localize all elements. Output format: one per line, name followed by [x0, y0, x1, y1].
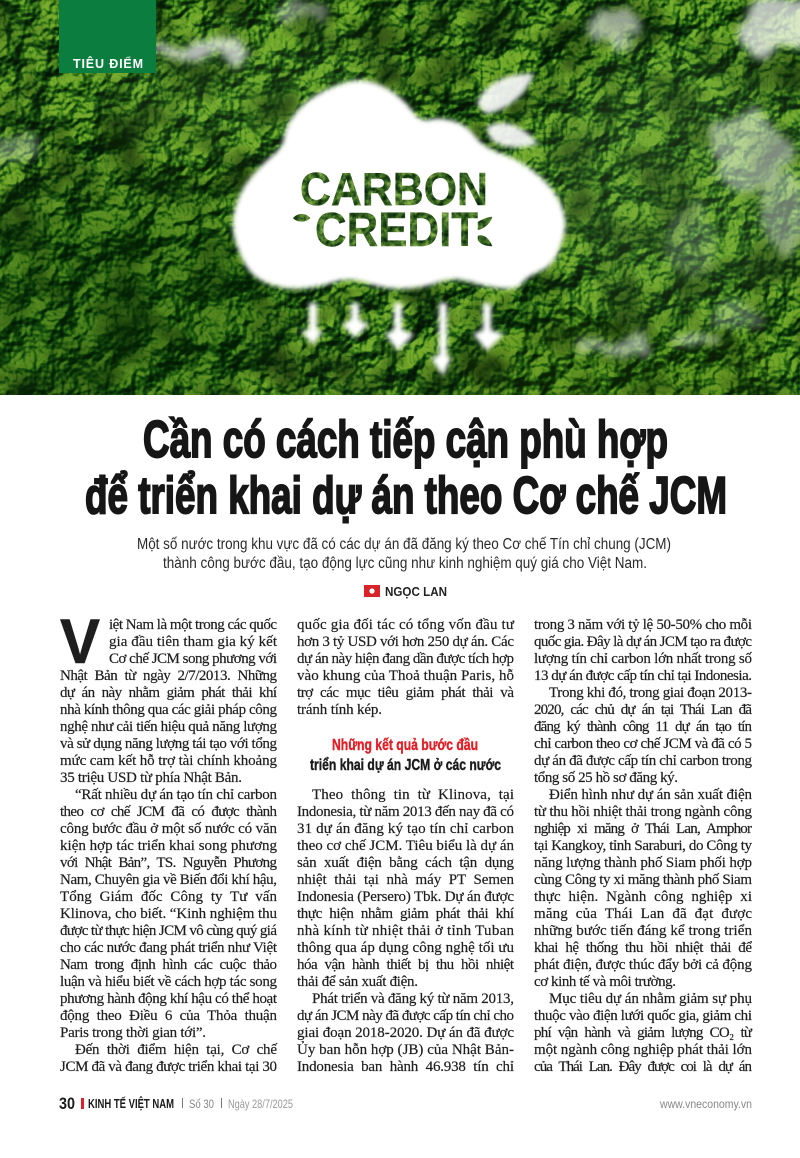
- footer: 30: [59, 1094, 75, 1113]
- article column 1: Klinova, cho biết. “Kinh nghiệm thu: [60, 906, 278, 922]
- article column 3: Điển hình như dự án sản xuất điện: [549, 787, 752, 803]
- article column 3: trong 3 năm với tỷ lệ 50-50% cho mỗi: [534, 617, 752, 633]
- article column 1: dự án này nhằm giảm phát thải khí: [60, 685, 277, 701]
- article column 3: măng của Thái Lan đã đạt được: [534, 906, 752, 922]
- footer: KINH TẾ VIỆT NAM: [88, 1096, 174, 1111]
- article column 1: Nam trong định hình các cuộc thảo: [60, 957, 277, 973]
- article column 2: 31 dự án đăng ký tạo tín chỉ carbon: [297, 821, 514, 837]
- article column 1: cho các nước đang phát triển như Việt: [60, 940, 278, 956]
- article column 3: quốc gia. Đây là dự án JCM tạo ra được: [534, 634, 752, 650]
- icon: author mark: [364, 585, 380, 597]
- article column 3: dự án đã được cấp tín chỉ carbon trong: [534, 753, 752, 769]
- article column 1: động theo Điều 6 của Thỏa thuận: [60, 1008, 278, 1024]
- article column 2: Indonesia, từ năm 2013 đến nay đã có: [297, 804, 514, 820]
- article column 2: dự án này hiện đang dần được tích hợp: [297, 651, 514, 667]
- article column 1: Đến thời điểm hiện tại, Cơ chế: [75, 1042, 277, 1058]
- article column 1: Nhật Bản từ ngày 2/7/2013. Những: [60, 668, 278, 684]
- icon: down arrows under the cloud: [301, 303, 504, 376]
- drop cap: V: [60, 607, 100, 677]
- article column 2: quốc gia đối tác có tổng vốn đầu tư: [297, 617, 515, 633]
- subheading: [310, 737, 501, 774]
- article column 2: Ủy ban hỗn hợp (JB) của Nhật Bản-: [297, 1041, 514, 1058]
- section tag: Tiêu điểm: [59, 0, 156, 73]
- article column 2: tránh tính kép.: [297, 702, 382, 718]
- footer: [59, 1094, 752, 1113]
- footer: www.vneconomy.vn: [659, 1097, 752, 1111]
- article column 2: Phát triển và đăng ký từ năm 2013,: [312, 991, 514, 1007]
- article column 1: công bước đầu ở một số nước có văn: [60, 821, 278, 837]
- article column 1: Cơ chế JCM song phương với: [109, 651, 277, 667]
- article column 3: cơ kinh tế và môi trường.: [534, 974, 676, 990]
- article column 3: những bước tiến đáng kể trong triển: [534, 923, 752, 939]
- title: [85, 411, 727, 525]
- article column 1: và sử dụng năng lượng tái tạo với tổng: [60, 736, 278, 752]
- article column 2: Theo thông tin từ Klinova, tại: [312, 787, 514, 803]
- article column 3: năng lượng thành phố Siam phối hợp: [534, 855, 752, 871]
- article column 1: kiện hợp tác triển khai song phương: [60, 838, 278, 854]
- carbon credit wordmark: CREDIT: [315, 204, 478, 257]
- article column 3: phát điện, được thúc đẩy bởi cả động: [534, 957, 752, 973]
- article column 2: nhà kính từ nhiệt thải ở tỉnh Tuban: [297, 923, 514, 939]
- article column 3: Mục tiêu dự án nhằm giảm sự phụ: [549, 991, 752, 1007]
- article column 2: thông qua áp dụng công nghệ tối ưu: [297, 940, 514, 956]
- carbon credit wordmark: CARBON: [300, 163, 488, 215]
- article column 2: hóa vận hành thiết bị thu hồi nhiệt: [297, 957, 515, 973]
- article column 3: từ thu hồi nhiệt thải trong ngành công: [534, 804, 752, 820]
- byline: NGỌC LAN: [385, 584, 447, 599]
- subheading: triển khai dự án JCM ở các nước: [310, 756, 501, 774]
- carbon credit wordmark: [293, 172, 492, 247]
- article column 3: thuộc vào điện lưới quốc gia, giảm chi: [534, 1008, 752, 1024]
- article column 2: Indonesia ban hành 46.938 tín chỉ: [297, 1059, 514, 1075]
- article column 1: phương hành động khí hậu có thể hoạt: [60, 991, 278, 1007]
- icon: cloud leaves: [477, 74, 538, 147]
- article column 1: [60, 607, 278, 1075]
- article column 1: theo cơ chế JCM đã có được thành: [60, 804, 278, 820]
- article column 2: vào khung của Thoả thuận Paris, hỗ: [297, 668, 514, 684]
- article column 1: nhà kính thông qua các giải pháp công: [60, 702, 278, 718]
- article column 2: giai đoạn 2018-2020. Dự án đã được: [297, 1025, 514, 1041]
- article column 3: tại Kangkoy, tỉnh Saraburi, do Công ty: [534, 838, 752, 854]
- article column 1: với Nhật Bản”, TS. Nguyễn Phương: [60, 855, 278, 871]
- article column 3: nghiệp xi măng ở Thái Lan, Amphor: [534, 821, 752, 837]
- article column 3: 2020, các chủ dự án tại Thái Lan đã: [534, 702, 752, 718]
- article column 1: “Rất nhiều dự án tạo tín chỉ carbon: [75, 787, 278, 803]
- article column 3: của Thái Lan. Đây được coi là dự án: [534, 1059, 752, 1075]
- fog wisps: [0, 0, 800, 353]
- article column 2: thực hiện nhằm giảm phát thải khí: [297, 906, 514, 922]
- subtitle: [137, 536, 671, 572]
- article column 3: lượng tín chỉ carbon lớn nhất trong số: [534, 651, 752, 667]
- section tag: Tiêu điểm: TIÊU ĐIỂM: [73, 56, 143, 71]
- article column 1: mức cam kết hỗ trợ tài chính khoảng: [60, 753, 278, 769]
- article column 1: nghệ như cải tiến hiệu quả năng lượng: [60, 719, 278, 735]
- article column 1: Nam, Chuyên gia về Biến đổi khí hậu,: [60, 872, 277, 888]
- article column 1: gia đầu tiên tham gia ký kết: [109, 634, 278, 650]
- article column 1: JCM đã và đang được triển khai tại 30: [60, 1059, 277, 1075]
- article column 2: Indonesia (Persero) Tbk. Dự án được: [297, 889, 514, 905]
- article column 3: cùng Công ty xi măng thành phố Siam: [534, 872, 752, 888]
- article column 3: chỉ carbon theo cơ chế JCM và đã có 5: [534, 736, 752, 752]
- article column 1: Paris trong thời gian tới”.: [60, 1025, 206, 1041]
- article column 2: thải để sản xuất điện.: [297, 974, 418, 990]
- article column 2: trợ các mục tiêu giảm phát thải và: [297, 685, 514, 701]
- article column 2: [297, 617, 515, 1075]
- article column 3: [534, 617, 753, 1075]
- cloud shape with leaf and arrows: [233, 74, 565, 376]
- article column 3: đăng ký thành công 11 dự án tạo tín: [534, 719, 752, 735]
- subtitle: thành công bước đầu, tạo động lực cũng như kinh nghiệm quý giá cho Việt Nam.: [163, 555, 647, 572]
- footer: Ngày 28/7/2025: [228, 1097, 293, 1111]
- byline: [364, 584, 447, 599]
- footer: Số 30: [189, 1097, 214, 1111]
- article column 1: iệt Nam là một trong các quốc: [109, 617, 277, 633]
- article column 2: hơn 3 tỷ USD với hơn 250 dự án. Các: [297, 634, 514, 650]
- article column 1: 35 triệu USD từ phía Nhật Bản.: [60, 770, 242, 786]
- article column 3: Trong khi đó, trong giai đoạn 2013-: [549, 685, 752, 701]
- subheading: Những kết quả bước đầu: [332, 737, 478, 754]
- article column 3: khai hệ thống thu hồi nhiệt thải để: [534, 940, 752, 956]
- hero photo: forest with carbon credit cloud: [0, 0, 800, 420]
- article column 3: thực hiện. Ngành công nghiệp xi: [534, 889, 752, 905]
- article column 3: tổng số 25 hồ sơ đăng ký.: [534, 770, 678, 786]
- article column 2: theo cơ chế JCM. Tiêu biểu là dự án: [297, 838, 514, 854]
- article column 3: 13 dự án được cấp tín chỉ tại Indonesia.: [534, 668, 752, 684]
- article column 3: một ngành công nghiệp phát thải lớn: [534, 1042, 752, 1058]
- article column 1: Tổng Giám đốc Công ty Tư vấn: [60, 889, 278, 905]
- article column 1: luận và hiểu biết về cách hợp tác song: [60, 974, 278, 990]
- article column 2: nhiệt thải tại nhà máy PT Semen: [297, 872, 514, 888]
- article column 3: phí vận hành và giảm lượng CO₂ từ: [534, 1025, 753, 1041]
- article column 2: sản xuất điện bằng cách tận dụng: [297, 855, 514, 871]
- article column 1: được từ thực hiện JCM vô cùng quý giá: [60, 923, 277, 939]
- subtitle: Một số nước trong khu vực đã có các dự án đã đăng ký theo Cơ chế Tín chỉ chung (JCM): [137, 536, 671, 553]
- article column 2: dự án JCM này đã được cấp tín chỉ cho: [297, 1008, 514, 1024]
